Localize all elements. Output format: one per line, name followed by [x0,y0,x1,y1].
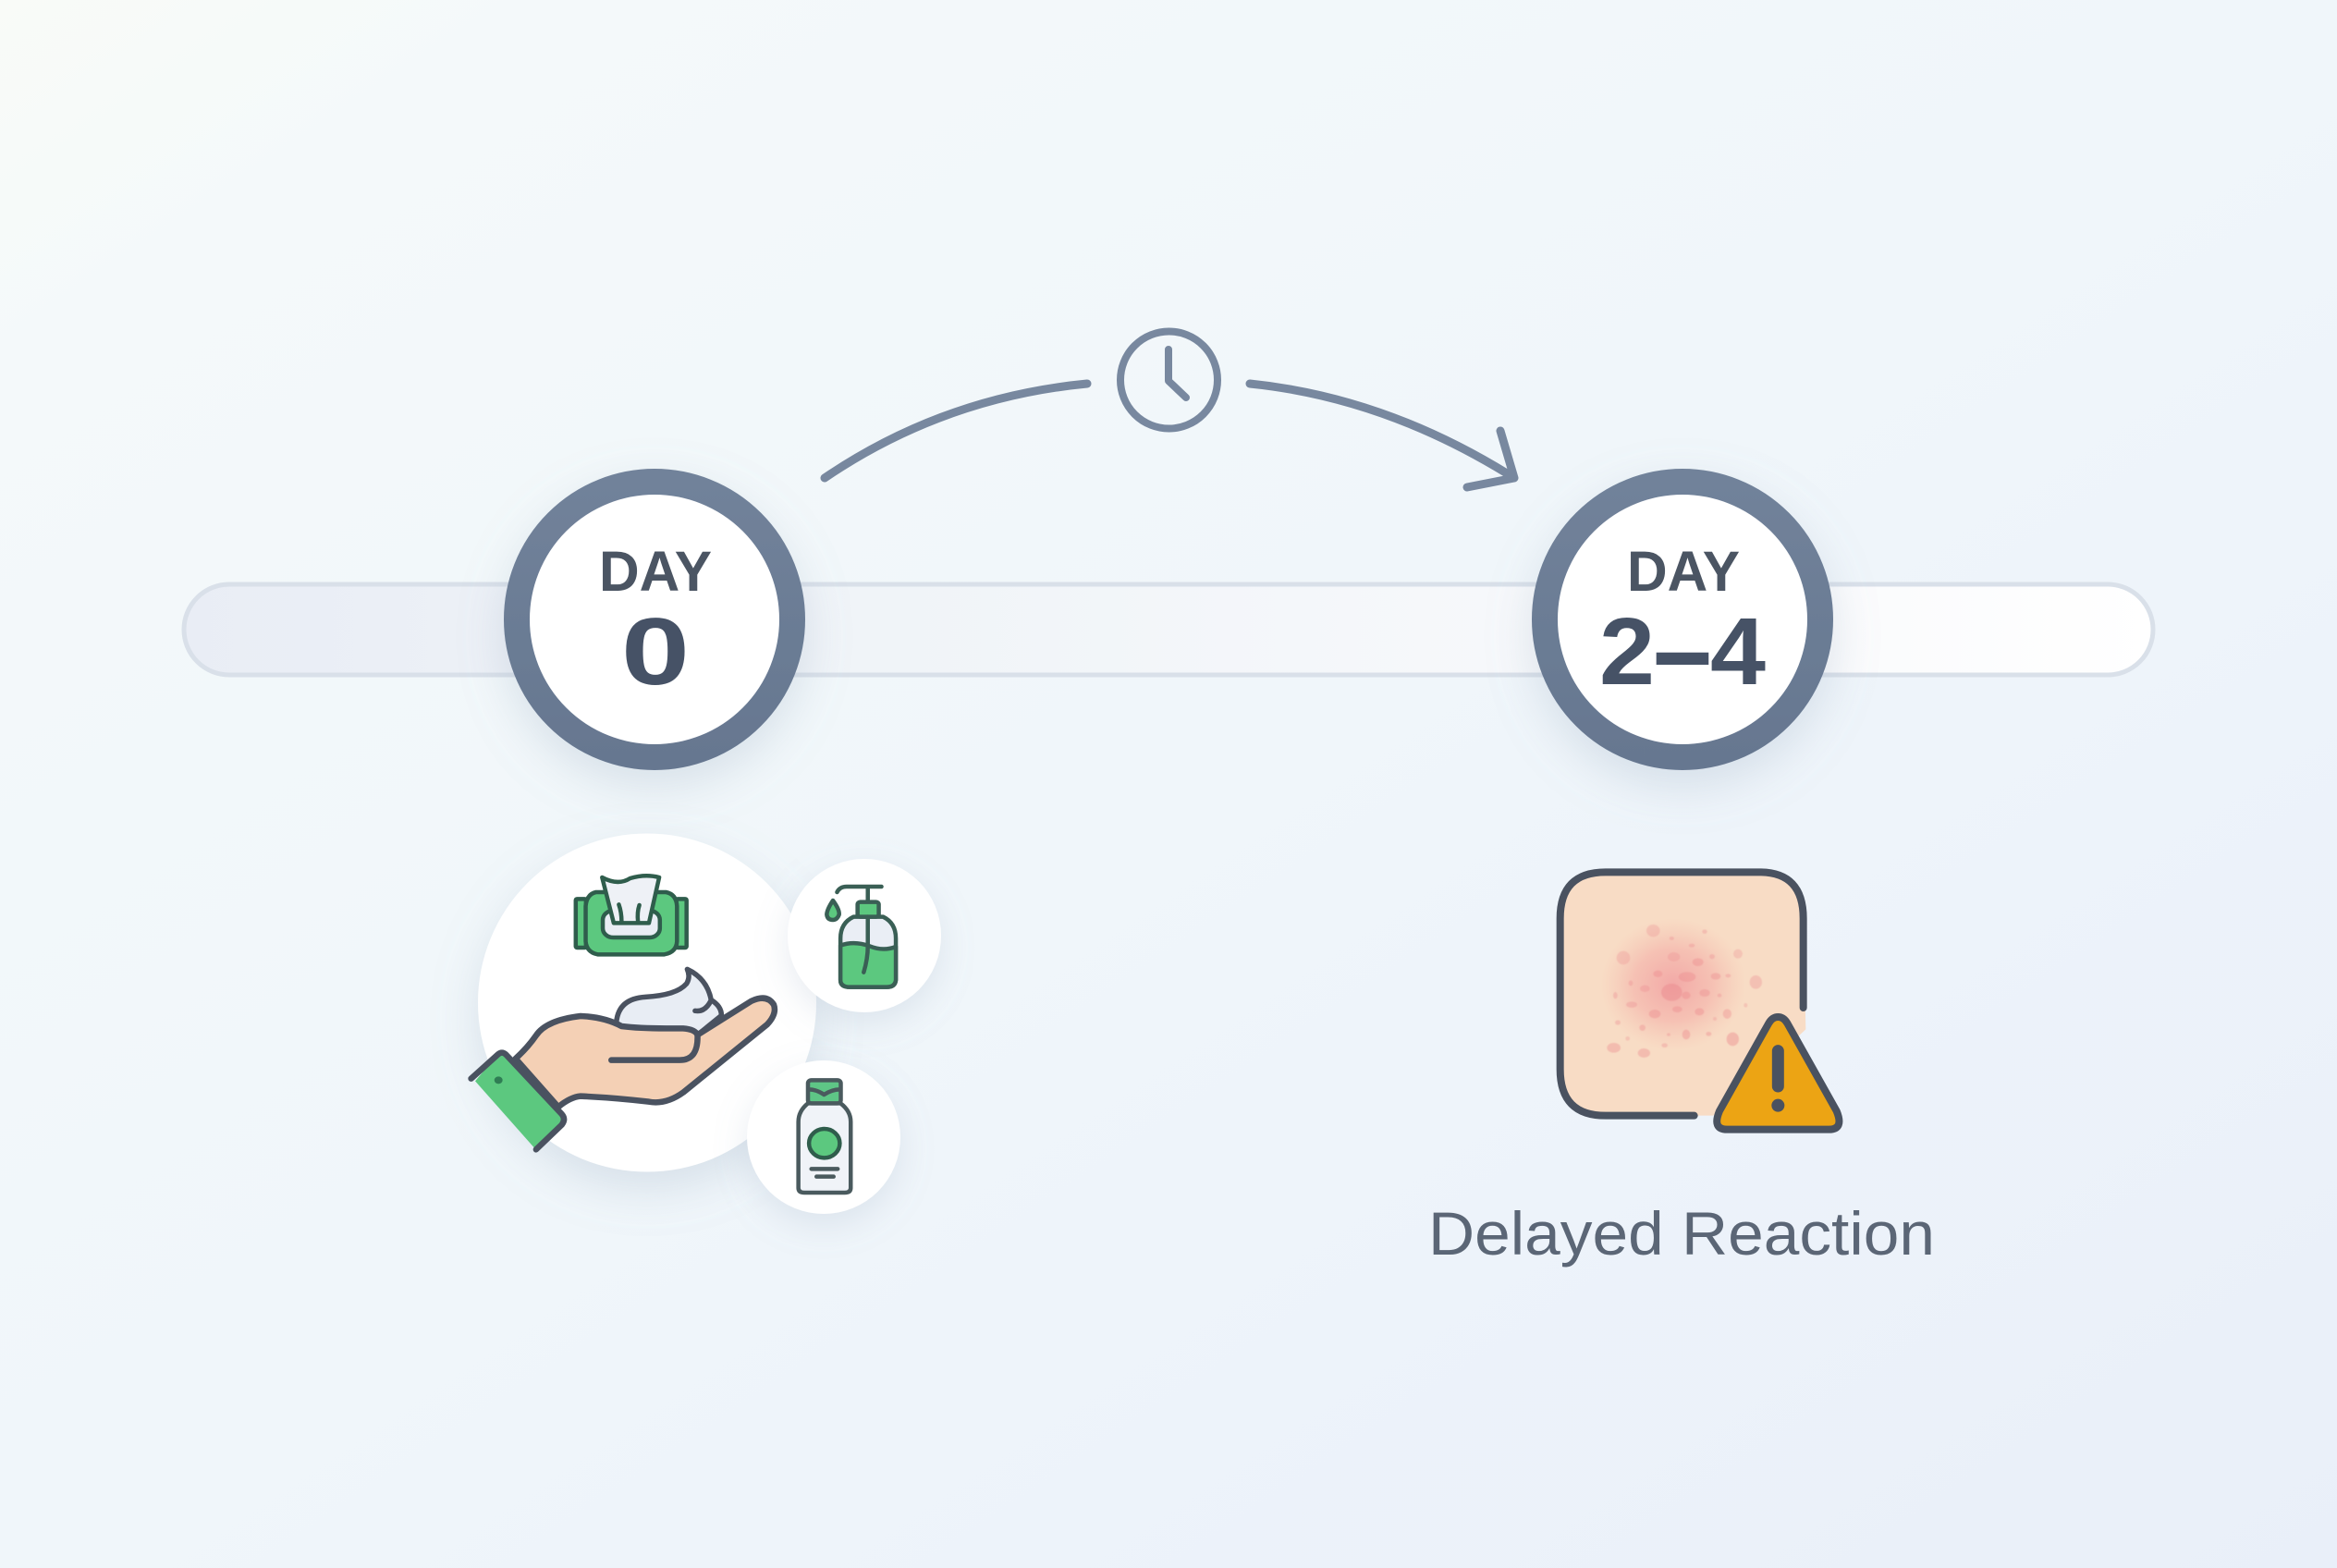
rash spots [1607,925,1762,1058]
skin fill [1560,872,1805,1116]
circle: pump backdrop [788,859,941,1012]
skin outline [1560,872,1804,1116]
icon: warning triangle [1717,1017,1839,1130]
circle: large backdrop [478,834,816,1172]
sleeve cuff [475,1053,563,1148]
icon: lotion bottle [799,1080,850,1193]
circle: bottle backdrop [747,1060,900,1214]
timeline track [184,584,2153,675]
panel: day 0 products [471,834,941,1214]
marker: day 2-4 [1545,482,1820,757]
icon: clock [1120,331,1217,429]
icon: hand with foam [471,969,775,1149]
arc: left segment [825,384,1087,478]
time arrow with clock [825,331,1514,487]
label: DAY: DAY [599,540,712,603]
icon: skin patch with rash [1560,872,1805,1116]
label: delayed reaction: Delayed Reaction [1428,1199,1935,1268]
fold of fingers [611,1035,698,1060]
label: DAY: DAY [1627,540,1740,603]
number: 2–4: 2–4 [1599,598,1766,704]
icon: pump bottle [826,887,896,987]
number: 0: 0 [621,598,690,704]
foam [617,969,721,1035]
panel: skin reaction [1428,872,1935,1268]
icon: wipes pack [576,876,687,954]
hand shape [516,998,775,1107]
arc: right segment with arrowhead [1250,384,1514,487]
rash blotch [1601,918,1745,1051]
marker: day 0 [517,482,792,757]
